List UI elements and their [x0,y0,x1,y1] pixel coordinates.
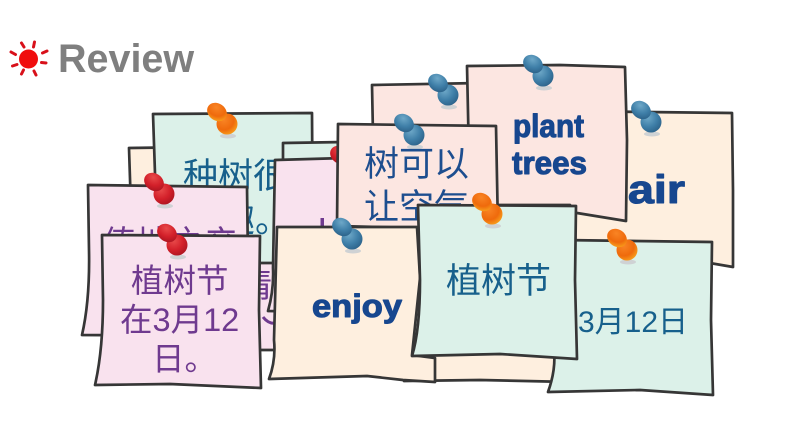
panel: lower peach note [404,205,570,382]
purple text stub [320,218,324,228]
panel: enjoy note [269,214,435,382]
text: arbor day: 植树节 [446,262,551,301]
text: tree sentence: 让空气 [364,188,469,227]
heading: Review: Review [58,37,194,81]
panel: 3月12日 teal note [548,225,713,395]
text: teal note sentence: 有趣。 [185,201,290,240]
blue pin [520,51,554,90]
panel: peach note far back left [129,147,200,240]
text: hidden purple characters: 情 [238,267,272,305]
blue pin [628,97,662,136]
red pin [141,169,174,208]
panel: pink note with purple text [82,169,250,336]
panel: hidden pink note behind [238,262,285,350]
orange pin [604,225,638,264]
orange pin [204,99,238,138]
orange pin [469,189,502,228]
text: air: air [628,168,685,212]
panel: plant trees note [467,51,627,221]
panel: large teal note [153,99,313,263]
text: arbor day date: 在3月12 [120,302,239,338]
panel: small teal note [283,142,345,170]
panel: note with air [560,97,733,267]
blue pin [391,110,424,150]
panel: back salmon note [372,70,480,135]
text: plant trees: trees [512,145,587,181]
text: plant trees: plant [513,108,584,144]
panel: tree air note [337,110,498,230]
red pin [154,220,188,260]
blue pin [425,70,458,110]
red pin partly hidden [327,142,360,182]
panel: middle pink note [268,142,360,312]
blue pin [329,214,362,254]
text: clipped purple line: 值地之产 [102,225,238,263]
text: enjoy: enjoy [312,288,402,324]
text: tree sentence: 树可以 [364,145,469,184]
icon: red sun [11,42,47,75]
panel: front pink note [95,220,261,388]
text: teal note sentence: 种树很 [183,157,288,196]
panel: front teal note [412,189,577,359]
text: date: 3月12日 [578,306,688,339]
text: plant trees [512,108,587,181]
text: arbor day date: 植树节 [131,263,229,299]
text: arbor day date: 日。 [152,341,217,377]
